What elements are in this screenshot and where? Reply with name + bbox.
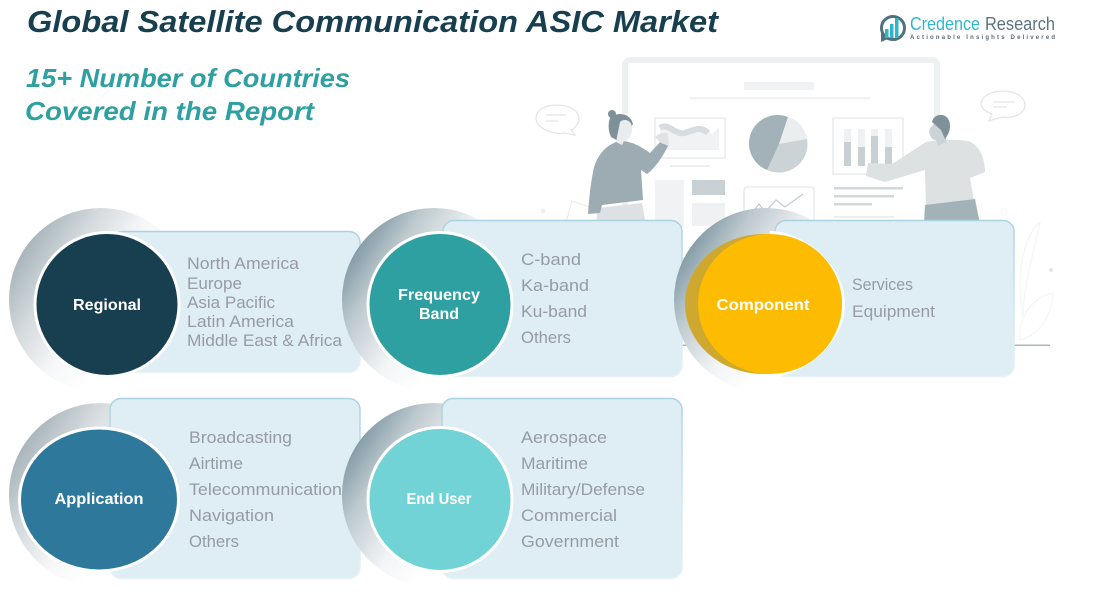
monitor frame (625, 60, 937, 260)
circle badge (21, 430, 177, 570)
circle badge (35, 232, 179, 376)
list: Broadcasting (189, 428, 292, 447)
heading: End User (406, 491, 472, 508)
heading: Component (716, 297, 810, 314)
list: Military/Defense (521, 480, 645, 499)
list: C-band (521, 250, 581, 269)
list: North America (187, 254, 300, 273)
list (187, 254, 343, 350)
panel: Application (9, 398, 360, 587)
list: Commercial (521, 506, 617, 525)
list (189, 428, 342, 551)
list: Telecommunication (189, 480, 342, 499)
heading: Frequency (398, 287, 480, 304)
list: Ku-band (521, 302, 587, 321)
list: Navigation (189, 506, 274, 525)
list: Ka-band (521, 276, 589, 295)
subtitle: Covered in the Report (25, 96, 315, 126)
lower left blocks (655, 180, 725, 228)
logo: Credence Research: Actionable Insights Delivered (910, 35, 1055, 41)
circle badge (685, 234, 842, 374)
faint leaves and dots (540, 208, 1053, 340)
list: Aerospace (521, 428, 607, 447)
panel: Component (674, 208, 1014, 392)
card (775, 220, 1014, 376)
list (852, 275, 935, 321)
heading: Regional (73, 297, 141, 314)
ring shadow (342, 208, 526, 392)
logo icon (881, 16, 904, 42)
background illustration: data presentation (536, 60, 1053, 346)
logo: Credence Research: Credence (910, 14, 980, 34)
card (110, 398, 360, 578)
speech bubble left (536, 105, 579, 135)
panel: Regional (9, 208, 360, 392)
bar chart (833, 118, 903, 174)
ring shadow (9, 208, 193, 392)
floor line (682, 344, 1050, 346)
ring shadow (674, 208, 858, 392)
line chart (744, 187, 814, 227)
text lines (834, 187, 903, 218)
subtitle: 15+ Number of Countries (26, 63, 350, 93)
list: Asia Pacific (187, 293, 275, 312)
panel: Frequency Band: Band (419, 306, 459, 323)
presenter woman (566, 110, 669, 224)
circle badge (368, 232, 512, 376)
circle badge (368, 428, 512, 572)
card (443, 220, 682, 376)
ring shadow (342, 403, 526, 587)
heading: Application (54, 491, 144, 508)
pie chart (749, 115, 808, 172)
card (112, 232, 360, 372)
list: Equipment (852, 302, 935, 321)
white outline (700, 231, 845, 377)
list: Airtime (189, 454, 243, 473)
list: Services (852, 275, 913, 294)
logo: Credence Research (881, 14, 1055, 42)
presenter man (866, 115, 985, 224)
list: Others (521, 328, 571, 347)
ring shadow (9, 403, 193, 587)
list: Latin America (187, 312, 295, 331)
panel: End User (342, 398, 682, 587)
subtitle (25, 63, 350, 126)
list (521, 428, 645, 551)
list: Government (521, 532, 619, 551)
small area chart (655, 118, 725, 167)
list: Maritime (521, 454, 588, 473)
logo: Credence Research: Research (985, 14, 1055, 34)
white outline (18, 426, 180, 572)
panel: Frequency Band (342, 208, 682, 392)
list: Others (189, 532, 239, 551)
list: Middle East & Africa (187, 331, 343, 350)
speech bubble right (981, 91, 1025, 121)
card (442, 398, 682, 578)
list: Europe (187, 274, 242, 293)
title: Global Satellite Communication ASIC Market (27, 4, 720, 39)
list (521, 250, 589, 347)
